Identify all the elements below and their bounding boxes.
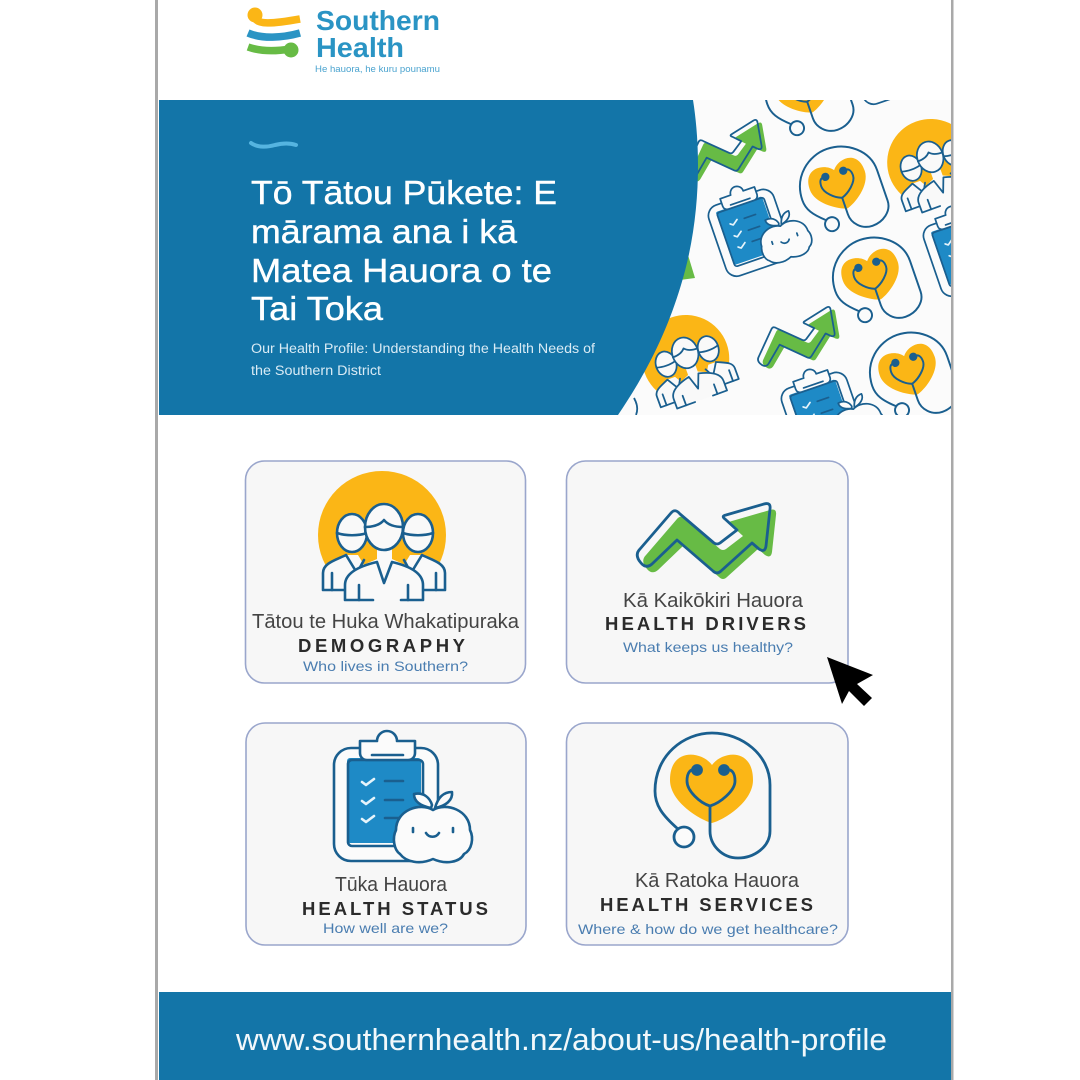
health services labels: Where & how do we get healthcare? [578,921,838,937]
health status labels: How well are we? [323,920,448,936]
health services labels: Kā Ratoka Hauora [635,870,800,892]
demography labels: Tātou te Huka Whakatipuraka [252,611,520,633]
health status labels: Tūka Hauora [335,874,448,896]
icon: hero squiggle [251,143,296,147]
health drivers labels: HEALTH DRIVERS [605,613,806,634]
panel: health services [566,723,848,945]
health status labels: HEALTH STATUS [302,898,488,919]
panel: health drivers [566,461,848,683]
icon: clipboard and apple [334,731,472,862]
health status labels [302,874,488,936]
demography labels: Who lives in Southern? [303,658,468,674]
footer band [159,992,951,1080]
title [251,174,557,327]
demography labels [252,611,520,674]
icon: mouse cursor [827,657,873,706]
subtitle: the Southern District [251,363,381,378]
subtitle [251,341,595,378]
health services labels [578,870,838,937]
icon: trend arrow [637,504,776,579]
health drivers labels [605,590,806,655]
hero blue panel [159,100,698,415]
health services labels: HEALTH SERVICES [600,894,813,915]
footer URL: www.southernhealth.nz/about-us/health-profile [235,1022,887,1057]
icon: stethoscope heart [655,733,770,858]
logo wordmark: He hauora, he kuru pounamu [315,64,440,75]
health drivers labels: Kā Kaikōkiri Hauora [623,590,804,612]
panel: demography [246,461,526,683]
demography labels: DEMOGRAPHY [298,635,466,656]
icon: people [318,471,446,600]
subtitle: Our Health Profile: Understanding the Health Needs of [251,341,595,356]
document frame [155,0,954,1080]
logo wordmark: Southern [316,5,440,36]
title: Tai Toka [251,290,384,327]
title: Matea Hauora o te [251,252,552,289]
title: Tō Tātou Pūkete: E [251,174,557,211]
panel: health status [246,723,526,945]
logo wordmark: Health [316,32,404,63]
icon: logo waves [248,8,300,58]
title: mārama ana i kā [251,213,518,250]
hero icon pattern [633,100,951,415]
logo: Southern Health [248,5,440,75]
logo wordmark [315,5,440,75]
health drivers labels: What keeps us healthy? [623,639,793,655]
